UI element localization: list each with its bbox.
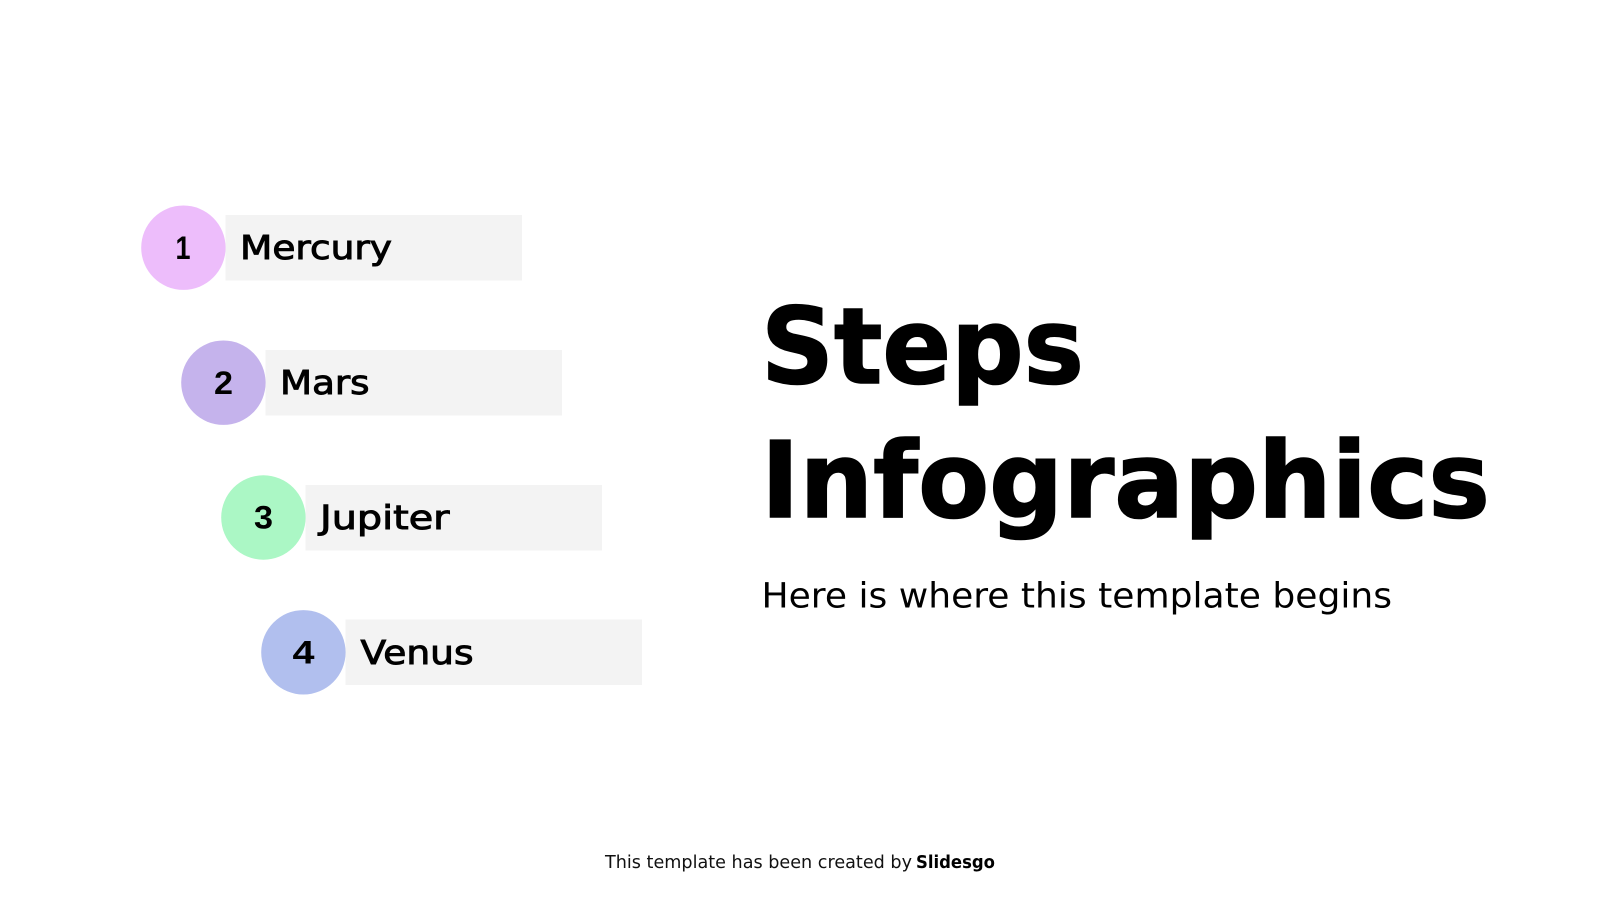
number 3: 3: [254, 500, 273, 536]
label Jupiter: Jupiter: [318, 498, 450, 537]
label bar 3: [306, 485, 602, 550]
subtitle: Here is where this template begins: [762, 576, 1392, 616]
label bar 4: [346, 620, 642, 685]
step 3: Jupiter: [221, 475, 602, 560]
label bar 1: [226, 215, 522, 280]
label Mars: Mars: [280, 363, 370, 402]
circle 3: [221, 475, 306, 560]
steps list: [141, 206, 642, 694]
footer credit: This template has been created by: [604, 852, 912, 873]
step 2: Mars: [181, 340, 562, 425]
title: Infographics: [761, 420, 1490, 542]
number 2: 2: [214, 365, 233, 401]
step 1: Mercury: [141, 206, 522, 290]
label Venus: Venus: [360, 633, 474, 672]
label bar 2: [266, 350, 562, 416]
circle 1: [141, 206, 226, 290]
label Mercury: Mercury: [240, 228, 392, 267]
circle 2: [181, 340, 266, 425]
circle 4: [261, 610, 346, 694]
title: Steps: [761, 286, 1084, 408]
step 4: Venus: [261, 610, 642, 694]
number 4: 4: [292, 634, 315, 670]
footer credit: Slidesgo: [916, 852, 995, 873]
number 1: 1: [176, 230, 190, 266]
title: [761, 286, 1490, 542]
